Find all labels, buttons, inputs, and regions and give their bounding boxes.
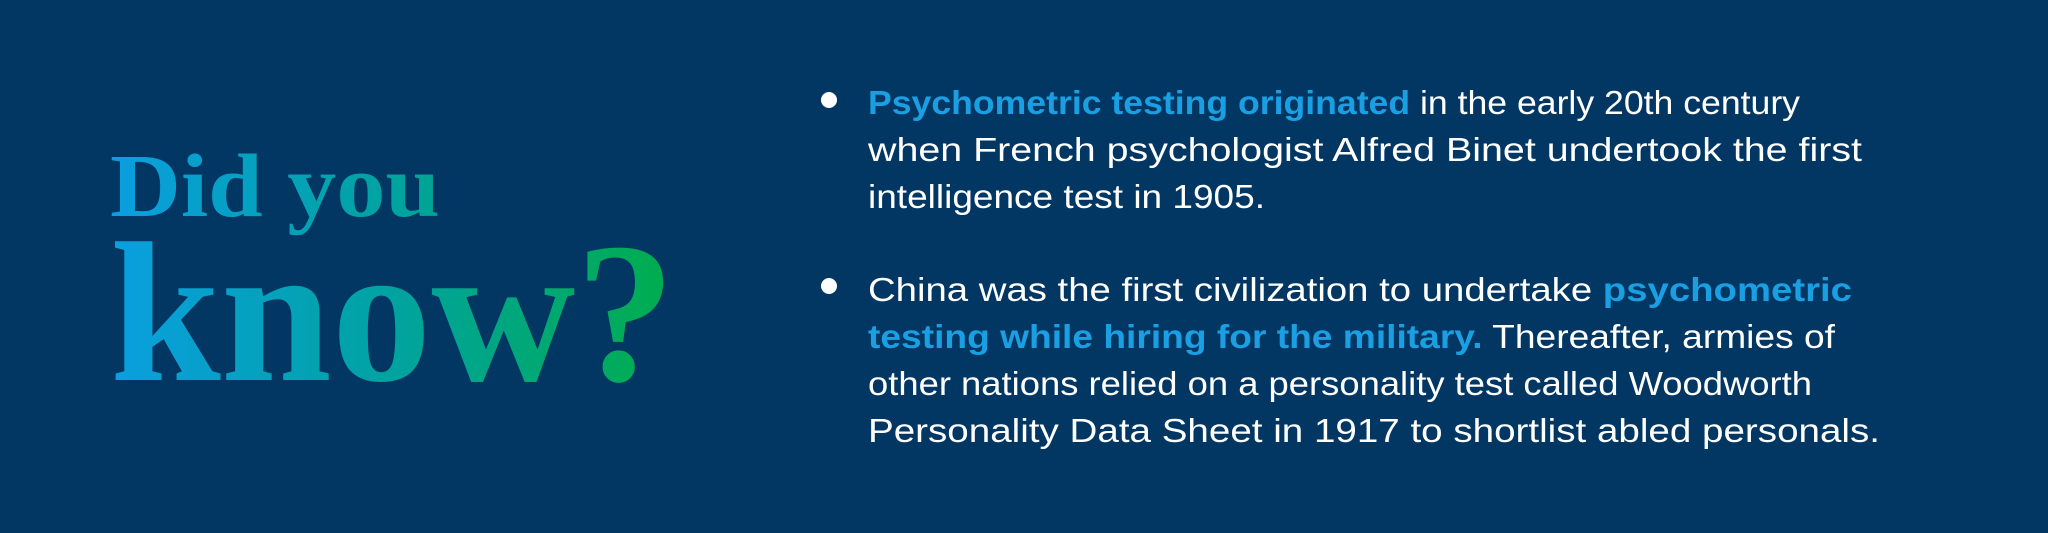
heading: Did you know? (110, 137, 675, 424)
fact 1: intelligence test in 1905. (868, 178, 1265, 215)
fact 1: Psychometric testing originated in the early 20th century (868, 84, 1801, 121)
fact 2: testing while hiring for the military. Thereafter, armies of (868, 318, 1836, 355)
heading line 2: know? (110, 203, 675, 424)
fact 1 (821, 84, 1862, 215)
bullet 2 (821, 278, 837, 294)
fact 2: China was the first civilization to undertake psychometric (868, 271, 1852, 308)
fact 1: when French psychologist Alfred Binet undertook the first (867, 131, 1862, 168)
fact 2 (821, 271, 1880, 449)
fact 2: Personality Data Sheet in 1917 to shortlist abled personals. (868, 412, 1880, 449)
heading line 1: Did you (110, 137, 440, 236)
bullet 1 (821, 92, 837, 108)
fact 2: other nations relied on a personality test called Woodworth (868, 365, 1812, 402)
